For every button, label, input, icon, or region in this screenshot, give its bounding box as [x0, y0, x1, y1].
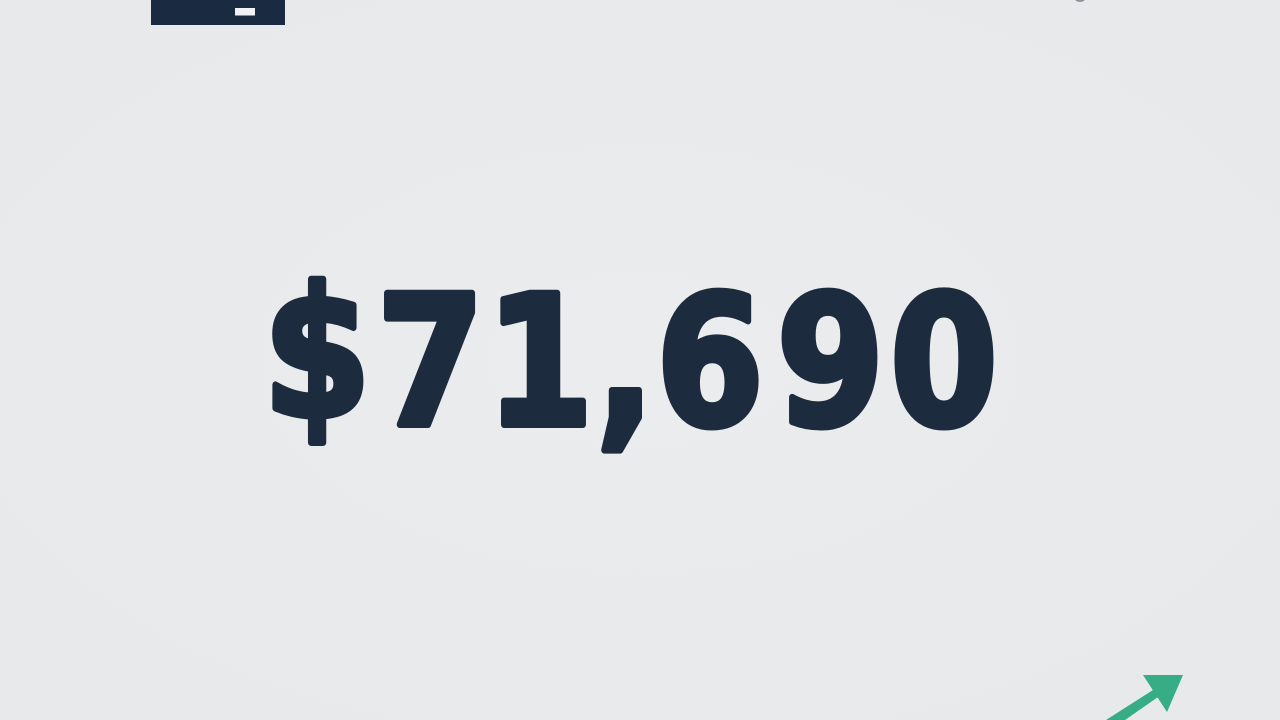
- icon: cropped dark box at top: [151, 0, 285, 25]
- icon: cropped grey speck at top: [1075, 0, 1085, 2]
- main value: $71,690: [263, 249, 998, 467]
- icon: green up-trend arrow: [1106, 675, 1183, 720]
